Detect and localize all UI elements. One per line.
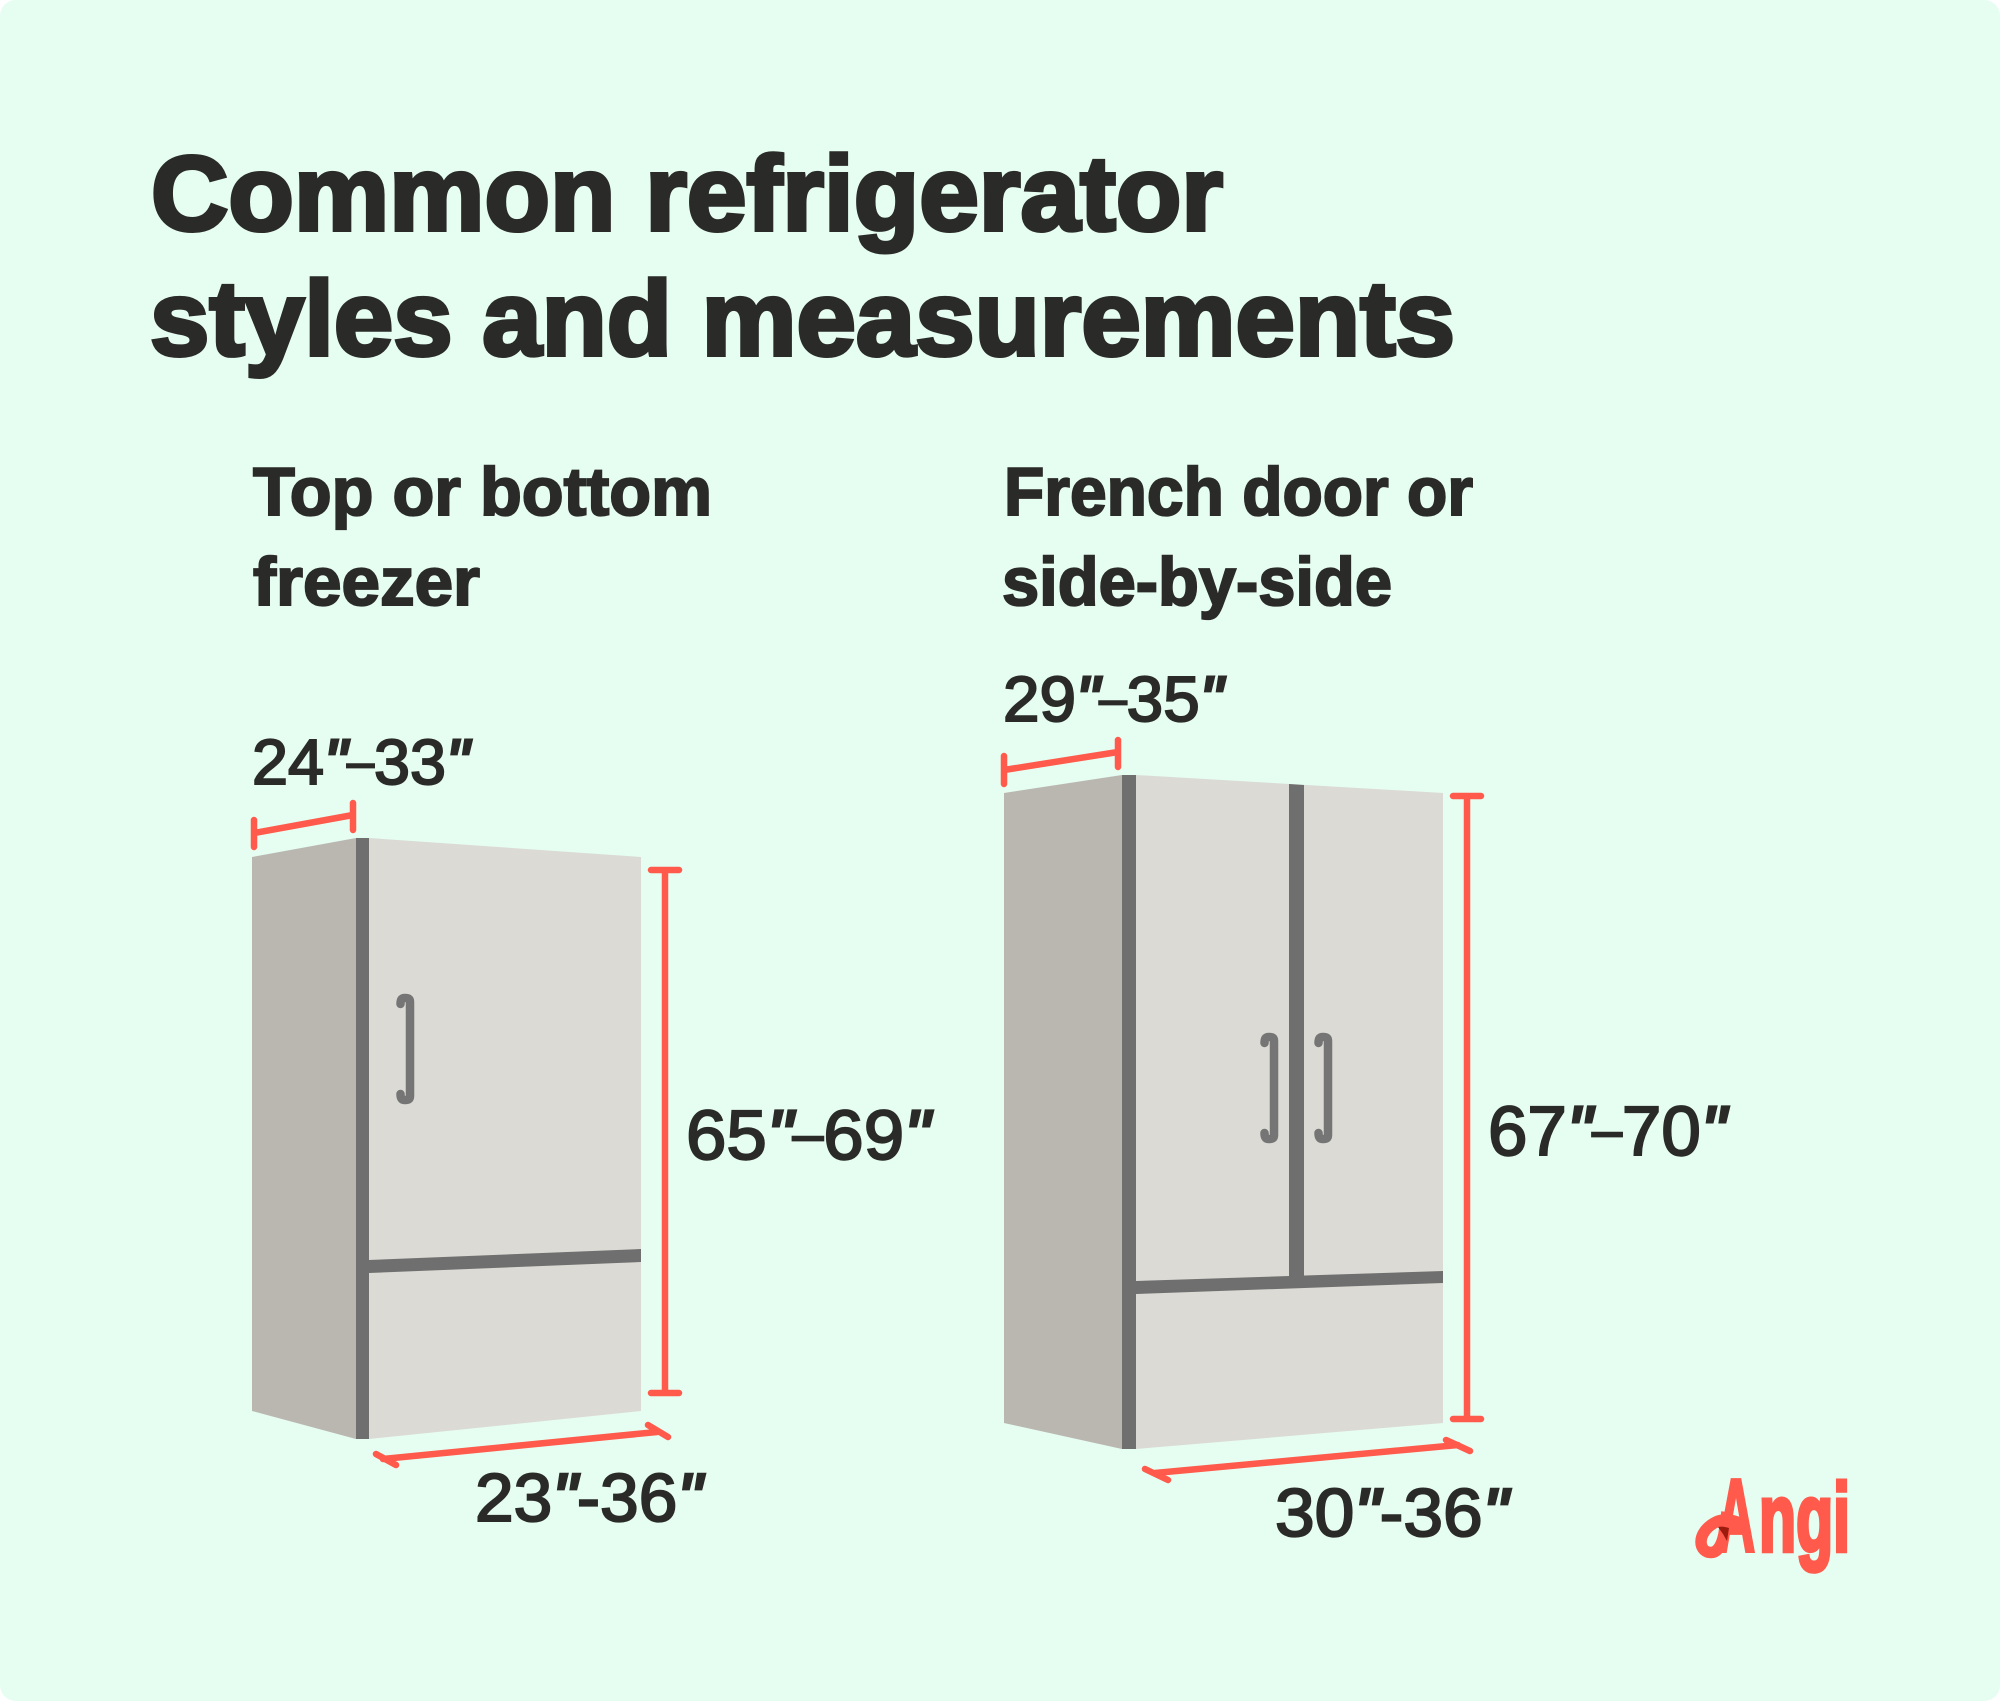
depth measure bracket left (254, 803, 353, 847)
title: Common refrigerator (151, 135, 1223, 253)
depth label right: " (1200, 663, 1226, 735)
height measure bracket right (1453, 796, 1481, 1419)
height label right: – (1592, 1101, 1622, 1160)
height measure bracket left (651, 870, 679, 1393)
refrigerator: french door or side-by-side (1004, 775, 1443, 1449)
width label left: 23"-36" (475, 1460, 705, 1536)
width label right: 30"-36" (1275, 1475, 1511, 1551)
depth label left: 24" (252, 726, 347, 798)
heading: top or bottom freezer: Top or bottom (253, 454, 712, 530)
title (150, 135, 1455, 378)
height label left: 65" (686, 1096, 792, 1174)
height label right: " (1701, 1092, 1729, 1170)
width measure bracket left (376, 1425, 668, 1465)
height label right: 70 (1622, 1092, 1701, 1170)
left door handle (1264, 1037, 1274, 1139)
depth label right: 35 (1127, 663, 1200, 735)
heading: top or bottom freezer (253, 454, 712, 620)
depth label left: 33 (374, 726, 446, 798)
logo: Angi: A (1717, 1458, 1755, 1573)
heading: french door or side-by-side: French door or (1004, 454, 1473, 530)
depth measure bracket right (1004, 740, 1118, 784)
refrigerator: top or bottom freezer (252, 838, 641, 1439)
logo: Angi (1701, 1458, 1850, 1573)
title: styles and measurements (150, 260, 1455, 378)
width measure bracket right (1145, 1440, 1470, 1480)
heading: top or bottom freezer: freezer (253, 544, 480, 620)
depth label left: " (446, 726, 472, 798)
depth label left: – (347, 736, 374, 789)
door handle (400, 998, 410, 1100)
heading: french door or side-by-side: side-by-side (1002, 544, 1392, 620)
height label left: 69 (823, 1096, 904, 1174)
height label left: – (793, 1105, 824, 1164)
logo: Angi: ngi (1759, 1463, 1850, 1572)
depth label right: 29" (1003, 663, 1099, 735)
right door handle (1318, 1037, 1328, 1139)
heading: french door or side-by-side (1002, 454, 1473, 620)
height label right: 67" (1488, 1092, 1592, 1170)
depth label right: – (1099, 673, 1127, 726)
height label left: " (904, 1096, 933, 1174)
